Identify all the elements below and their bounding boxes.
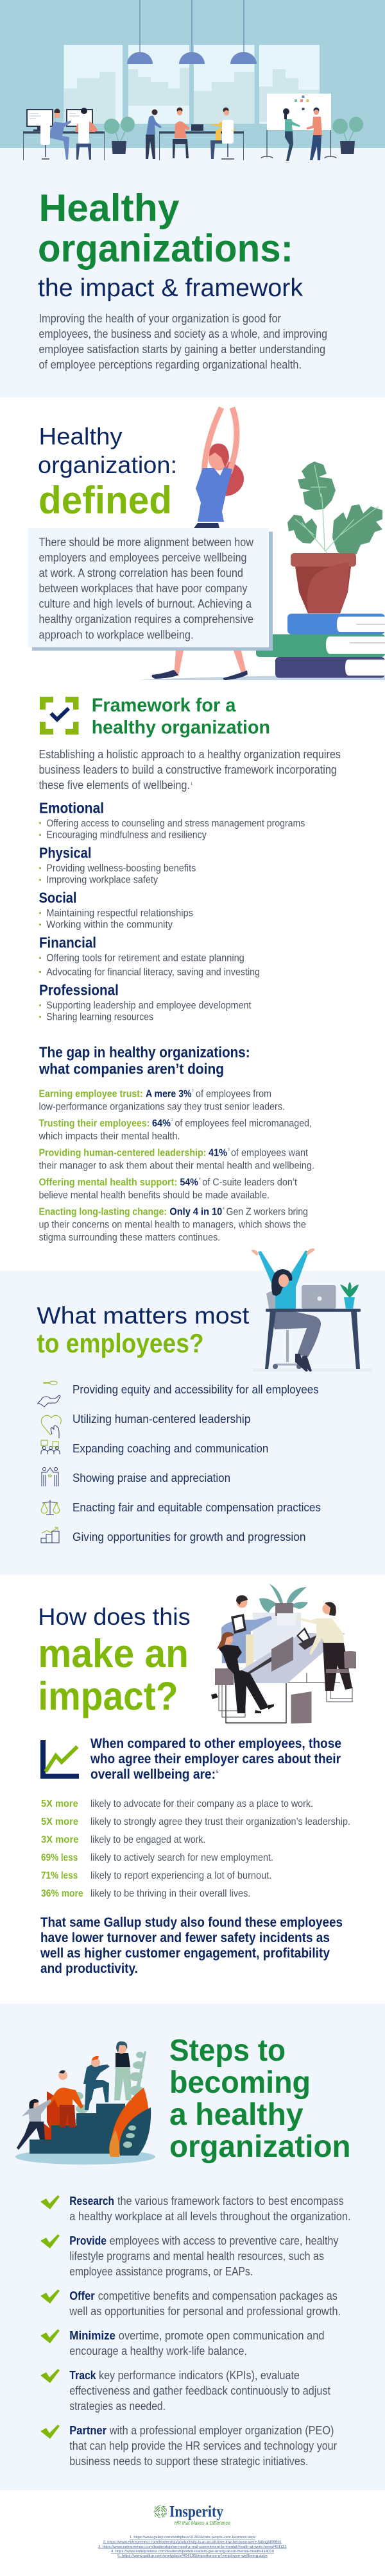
item: equity: Providing equity and accessibility for all employees [73, 1383, 319, 1396]
illustration: people climbing stairs [15, 2041, 155, 2165]
step: offer: competitive benefits and compensation packages as [98, 2289, 338, 2302]
icon: check [40, 2425, 60, 2439]
stat: advocate: 5X more [41, 1799, 78, 1809]
callout box [28, 528, 273, 651]
logo: Insperity [154, 2504, 230, 2526]
icon: check [40, 2289, 60, 2304]
element: physical [39, 845, 196, 885]
gap item: human-centered leadership [38, 1148, 314, 1172]
step: partner: business needs to support these strategic initiatives. [69, 2454, 308, 2468]
step: track: Track [69, 2368, 96, 2382]
gap item: mental health support: 54% [180, 1177, 198, 1188]
lead statement: who agree their employer cares about their [90, 1752, 341, 1766]
references: 3. https://www.entrepreneur.com/leadership/we-need-a-real-commitment-to-mental-health-at-work-heres/451131 [98, 2545, 287, 2549]
intro text [38, 747, 341, 792]
gap item: trusting employees: of employees feel micromanaged, [175, 1118, 312, 1129]
gap item: long-lasting change: Enacting long-lasting change: [38, 1207, 167, 1218]
element: financial: Financial [39, 935, 96, 951]
step: research: Research [69, 2194, 114, 2207]
heading: a healthy [169, 2098, 304, 2132]
panel: hero [0, 0, 385, 397]
item: equity [38, 1381, 319, 1407]
panel: framework [38, 695, 341, 1022]
callout box: approach to workplace wellbeing. [38, 628, 194, 641]
heading [92, 695, 270, 738]
logo: Insperity: HR that Makes a Difference [175, 2520, 230, 2526]
callout box: There should be more alignment between how [38, 535, 254, 549]
step: provide: Provide [69, 2234, 107, 2247]
gap item: long-lasting change: Only 4 in 10 [169, 1207, 222, 1218]
references [98, 2536, 287, 2558]
gap item: long-lasting change: up their concerns on mental health to managers, which shows the [38, 1220, 306, 1231]
panel: healthy organization defined [28, 408, 385, 680]
element: emotional: Emotional [39, 800, 104, 817]
icon: check [40, 2234, 60, 2248]
gap item: trusting employees [38, 1118, 312, 1142]
panel: make an impact [38, 1584, 356, 1976]
item: leadership: Utilizing human-centered leadership [73, 1412, 250, 1425]
callout box: between workplaces that have poor company [38, 581, 248, 595]
gap item: long-lasting change: Gen Z workers bring [226, 1207, 308, 1218]
step: track [40, 2368, 330, 2413]
element: emotional: Offering access to counseling and stress management programs [46, 818, 305, 829]
heading: healthy organization [92, 717, 270, 738]
heading: Steps to [169, 2034, 286, 2068]
stat: trust: likely to strongly agree they trust their organization’s leadership. [90, 1816, 350, 1827]
gap item: mental health support: believe mental health benefits should be made available. [38, 1190, 270, 1201]
gap item: long-lasting change [38, 1207, 308, 1243]
item: praise [42, 1468, 230, 1486]
heading: How does this [38, 1604, 191, 1630]
step: minimize: encourage a healthy work-life balance. [69, 2344, 247, 2357]
step: partner: that can help provide the HR services and technology your [69, 2439, 337, 2452]
callout box: employers and employees perceive wellbeing [38, 551, 246, 564]
stat: thriving: 36% more [41, 1888, 83, 1899]
item: leadership [41, 1412, 250, 1438]
step: minimize: overtime, promote open communication and [119, 2329, 325, 2342]
title: the impact & framework [38, 274, 303, 302]
item: compensation: Enacting fair and equitable compensation practices [73, 1500, 321, 1514]
element: professional: Sharing learning resources [46, 1011, 153, 1022]
gap item: employee trust: Earning employee trust: [38, 1089, 143, 1100]
gap item: mental health support: Offering mental health support: [38, 1177, 177, 1188]
item: coaching: Expanding coaching and communication [73, 1442, 268, 1455]
gap item: employee trust [38, 1089, 285, 1113]
element: social: Maintaining respectful relationships [46, 908, 193, 918]
element: physical: Improving workplace safety [46, 874, 158, 885]
lead statement: When compared to other employees, those [90, 1736, 341, 1751]
gap item: mental health support: of C-suite leaders don’t [202, 1177, 297, 1188]
heading [38, 1043, 250, 1077]
heading: defined [38, 479, 172, 522]
element: emotional: Encouraging mindfulness and resiliency [46, 829, 207, 840]
closing statement [40, 1915, 343, 1976]
step: research: a healthy workplace at all levels throughout the organization. [69, 2209, 351, 2223]
lead statement [90, 1736, 341, 1782]
people at whiteboard [283, 108, 322, 161]
stat: burnout: 71% less [41, 1870, 78, 1881]
step: offer [40, 2289, 341, 2318]
illustration: woman at desk [252, 1249, 372, 1372]
step: offer: Offer [69, 2289, 95, 2302]
potted plants [104, 117, 363, 154]
element: financial: Offering tools for retirement and estate planning [46, 952, 244, 963]
heading: becoming [169, 2066, 311, 2100]
title: Healthy [38, 187, 180, 229]
element: professional: Professional [39, 982, 119, 999]
people at middle desk [146, 108, 235, 159]
heading [38, 1604, 191, 1719]
step: minimize: Minimize [69, 2329, 116, 2342]
heading: make an [38, 1632, 189, 1676]
stat: engaged [41, 1834, 205, 1845]
icon: check [40, 2369, 60, 2383]
panel: the gap [38, 1043, 314, 1243]
heading [38, 423, 177, 522]
element: financial [39, 935, 260, 977]
title: organizations: [38, 227, 293, 270]
heading [37, 1302, 250, 1358]
illustration: stretching woman [137, 408, 385, 680]
element: professional: Supporting leadership and employee development [46, 1000, 252, 1011]
whiteboard [261, 94, 336, 158]
lead statement: overall wellbeing are: [90, 1767, 216, 1782]
desks [23, 131, 244, 160]
intro text: these five elements of wellbeing. [38, 778, 190, 792]
intro text: business leaders to build a constructive framework incorporating [38, 763, 337, 776]
gap item: mental health support: 4 [199, 1177, 201, 1181]
intro paragraph: of employee perceptions regarding organizational health. [38, 358, 302, 371]
gap item: human-centered leadership: 3 [228, 1148, 230, 1152]
step: research [40, 2194, 350, 2223]
step: track: effectiveness and gather feedback continuously to adjust [69, 2384, 330, 2397]
illustration: office scene [0, 0, 385, 161]
heading: The gap in healthy organizations: [39, 1043, 250, 1060]
panel: steps [0, 2004, 385, 2490]
gap item: long-lasting change: stigma surrounding these matters continues. [38, 1233, 220, 1243]
element: emotional [39, 800, 305, 840]
stat: search: 69% less [41, 1852, 78, 1863]
step: track: key performance indicators (KPIs), evaluate [99, 2368, 300, 2382]
gap item: employee trust: 2 [192, 1089, 194, 1093]
heading: Healthy [38, 423, 123, 450]
closing statement: That same Gallup study also found these employees [40, 1915, 343, 1930]
intro text: 1 [191, 783, 193, 786]
references: 5. https://www.gallup.com/workplace/404105/importance-of-employee-wellbeing.aspx [117, 2554, 268, 2558]
element: social: Social [38, 890, 77, 906]
step: offer: well as opportunities for personal and professional growth. [69, 2304, 341, 2318]
references: 2. https://www.entrepreneur.com/leadership/productivity-is-at-an-all-time-low-because-were-failing/456861 [103, 2541, 282, 2545]
element: financial: Advocating for financial literacy, saving and investing [46, 967, 260, 977]
intro paragraph: employees, the business and society as a whole, and improving [38, 327, 327, 340]
gap item: trusting employees: which impacts their mental health. [38, 1131, 180, 1142]
monitors [27, 110, 92, 131]
closing statement: have lower turnover and fewer safety incidents as [40, 1931, 330, 1945]
heading: what companies aren’t doing [38, 1060, 224, 1077]
gap item: employee trust: low-performance organizations say they trust senior leaders. [38, 1102, 285, 1113]
heading [169, 2034, 350, 2164]
element: physical: Physical [39, 845, 91, 861]
gap item: human-centered leadership: of employees want [231, 1148, 308, 1159]
gap item: employee trust: A mere 3% [146, 1089, 191, 1100]
item: praise: Showing praise and appreciation [73, 1471, 230, 1484]
illustration: office team [211, 1584, 356, 1724]
stat: trust: 5X more [41, 1816, 78, 1827]
step: provide: employee assistance programs, or EAPs. [69, 2264, 253, 2278]
gap item: mental health support [38, 1177, 297, 1201]
stat: engaged: 3X more [41, 1834, 79, 1845]
intro paragraph: employee satisfaction starts by gaining a better understanding [38, 342, 325, 356]
gap item: trusting employees: 64% [152, 1118, 171, 1129]
step: partner: Partner [69, 2423, 107, 2437]
gap item: trusting employees: 2 [171, 1118, 173, 1122]
intro paragraph: Improving the health of your organization is good for [38, 312, 281, 325]
element: social: Working within the community [46, 919, 173, 930]
stat: search: likely to actively search for new employment. [90, 1852, 273, 1863]
step: track: strategies as needed. [69, 2399, 166, 2413]
step: partner: with a professional employer organization (PEO) [109, 2423, 334, 2437]
gap item: long-lasting change: 4 [223, 1207, 225, 1211]
step: research: the various framework factors to best encompass [117, 2194, 344, 2207]
heading: organization [169, 2130, 350, 2164]
list: what matters [38, 1381, 321, 1543]
footer [98, 2504, 287, 2558]
callout box: culture and high levels of burnout. Achieving a [38, 597, 252, 610]
references: 4. https://www.entrepreneur.com/leadership/what-leaders-get-wrong-about-mental-health/414010 [111, 2550, 274, 2554]
step: provide: lifestyle programs and mental health resources, such as [69, 2249, 324, 2263]
element: social [38, 890, 193, 930]
intro text: Establishing a holistic approach to a healthy organization requires [38, 747, 341, 761]
stat: burnout: likely to report experiencing a lot of burnout. [90, 1870, 271, 1881]
stat: engaged: likely to be engaged at work. [90, 1834, 205, 1845]
element: physical: Providing wellness-boosting benefits [46, 863, 196, 874]
closing statement: well as higher customer engagement, profitability [40, 1946, 330, 1961]
item: growth: Giving opportunities for growth and progression [73, 1530, 305, 1543]
step: partner [40, 2423, 337, 2468]
icon: framed checkmark [40, 697, 78, 735]
icon: growth chart [40, 1740, 79, 1779]
heading: to employees? [37, 1328, 204, 1358]
illustration: plant on books [256, 461, 385, 678]
gap item: employee trust: of employees from [196, 1089, 271, 1100]
intro paragraph [38, 312, 327, 371]
step: minimize [40, 2329, 325, 2357]
panel: what matters most [0, 1249, 385, 1575]
step: provide [40, 2234, 339, 2278]
statistics list [41, 1799, 350, 1899]
title [38, 187, 303, 302]
icon: check [40, 2195, 60, 2209]
gap item: trusting employees: Trusting their employees: [38, 1118, 150, 1129]
stat: advocate: likely to advocate for their company as a place to work. [90, 1799, 313, 1809]
gap item: human-centered leadership: Providing human-centered leadership: [38, 1148, 207, 1159]
pendant lamps [127, 52, 257, 64]
step: provide: employees with access to preventive care, healthy [110, 2234, 339, 2247]
people at left desk [40, 108, 98, 160]
lead statement: 5 [216, 1770, 219, 1774]
gap item: human-centered leadership: their manager to ask them about their mental health and wellbeing. [38, 1161, 314, 1172]
callout box: at work. A strong correlation has been found [38, 566, 243, 579]
heading: Framework for a [92, 695, 236, 716]
gap item: human-centered leadership: 41% [209, 1148, 227, 1159]
icon: logo mark [154, 2505, 167, 2518]
closing statement: and productivity. [40, 1961, 138, 1976]
references: 1. https://www.gallup.com/workplace/312824/care-people-care-business.aspx [130, 2536, 255, 2539]
heading: organization: [38, 452, 177, 478]
logo: Insperity: Insperity [169, 2504, 223, 2521]
stat: thriving: likely to be thriving in their overall lives. [90, 1888, 250, 1899]
icon: check [40, 2329, 60, 2343]
callout box: healthy organization requires a comprehensive [38, 612, 253, 626]
element: professional [39, 982, 252, 1022]
heading: impact? [38, 1674, 178, 1719]
heading: What matters most [37, 1302, 250, 1329]
